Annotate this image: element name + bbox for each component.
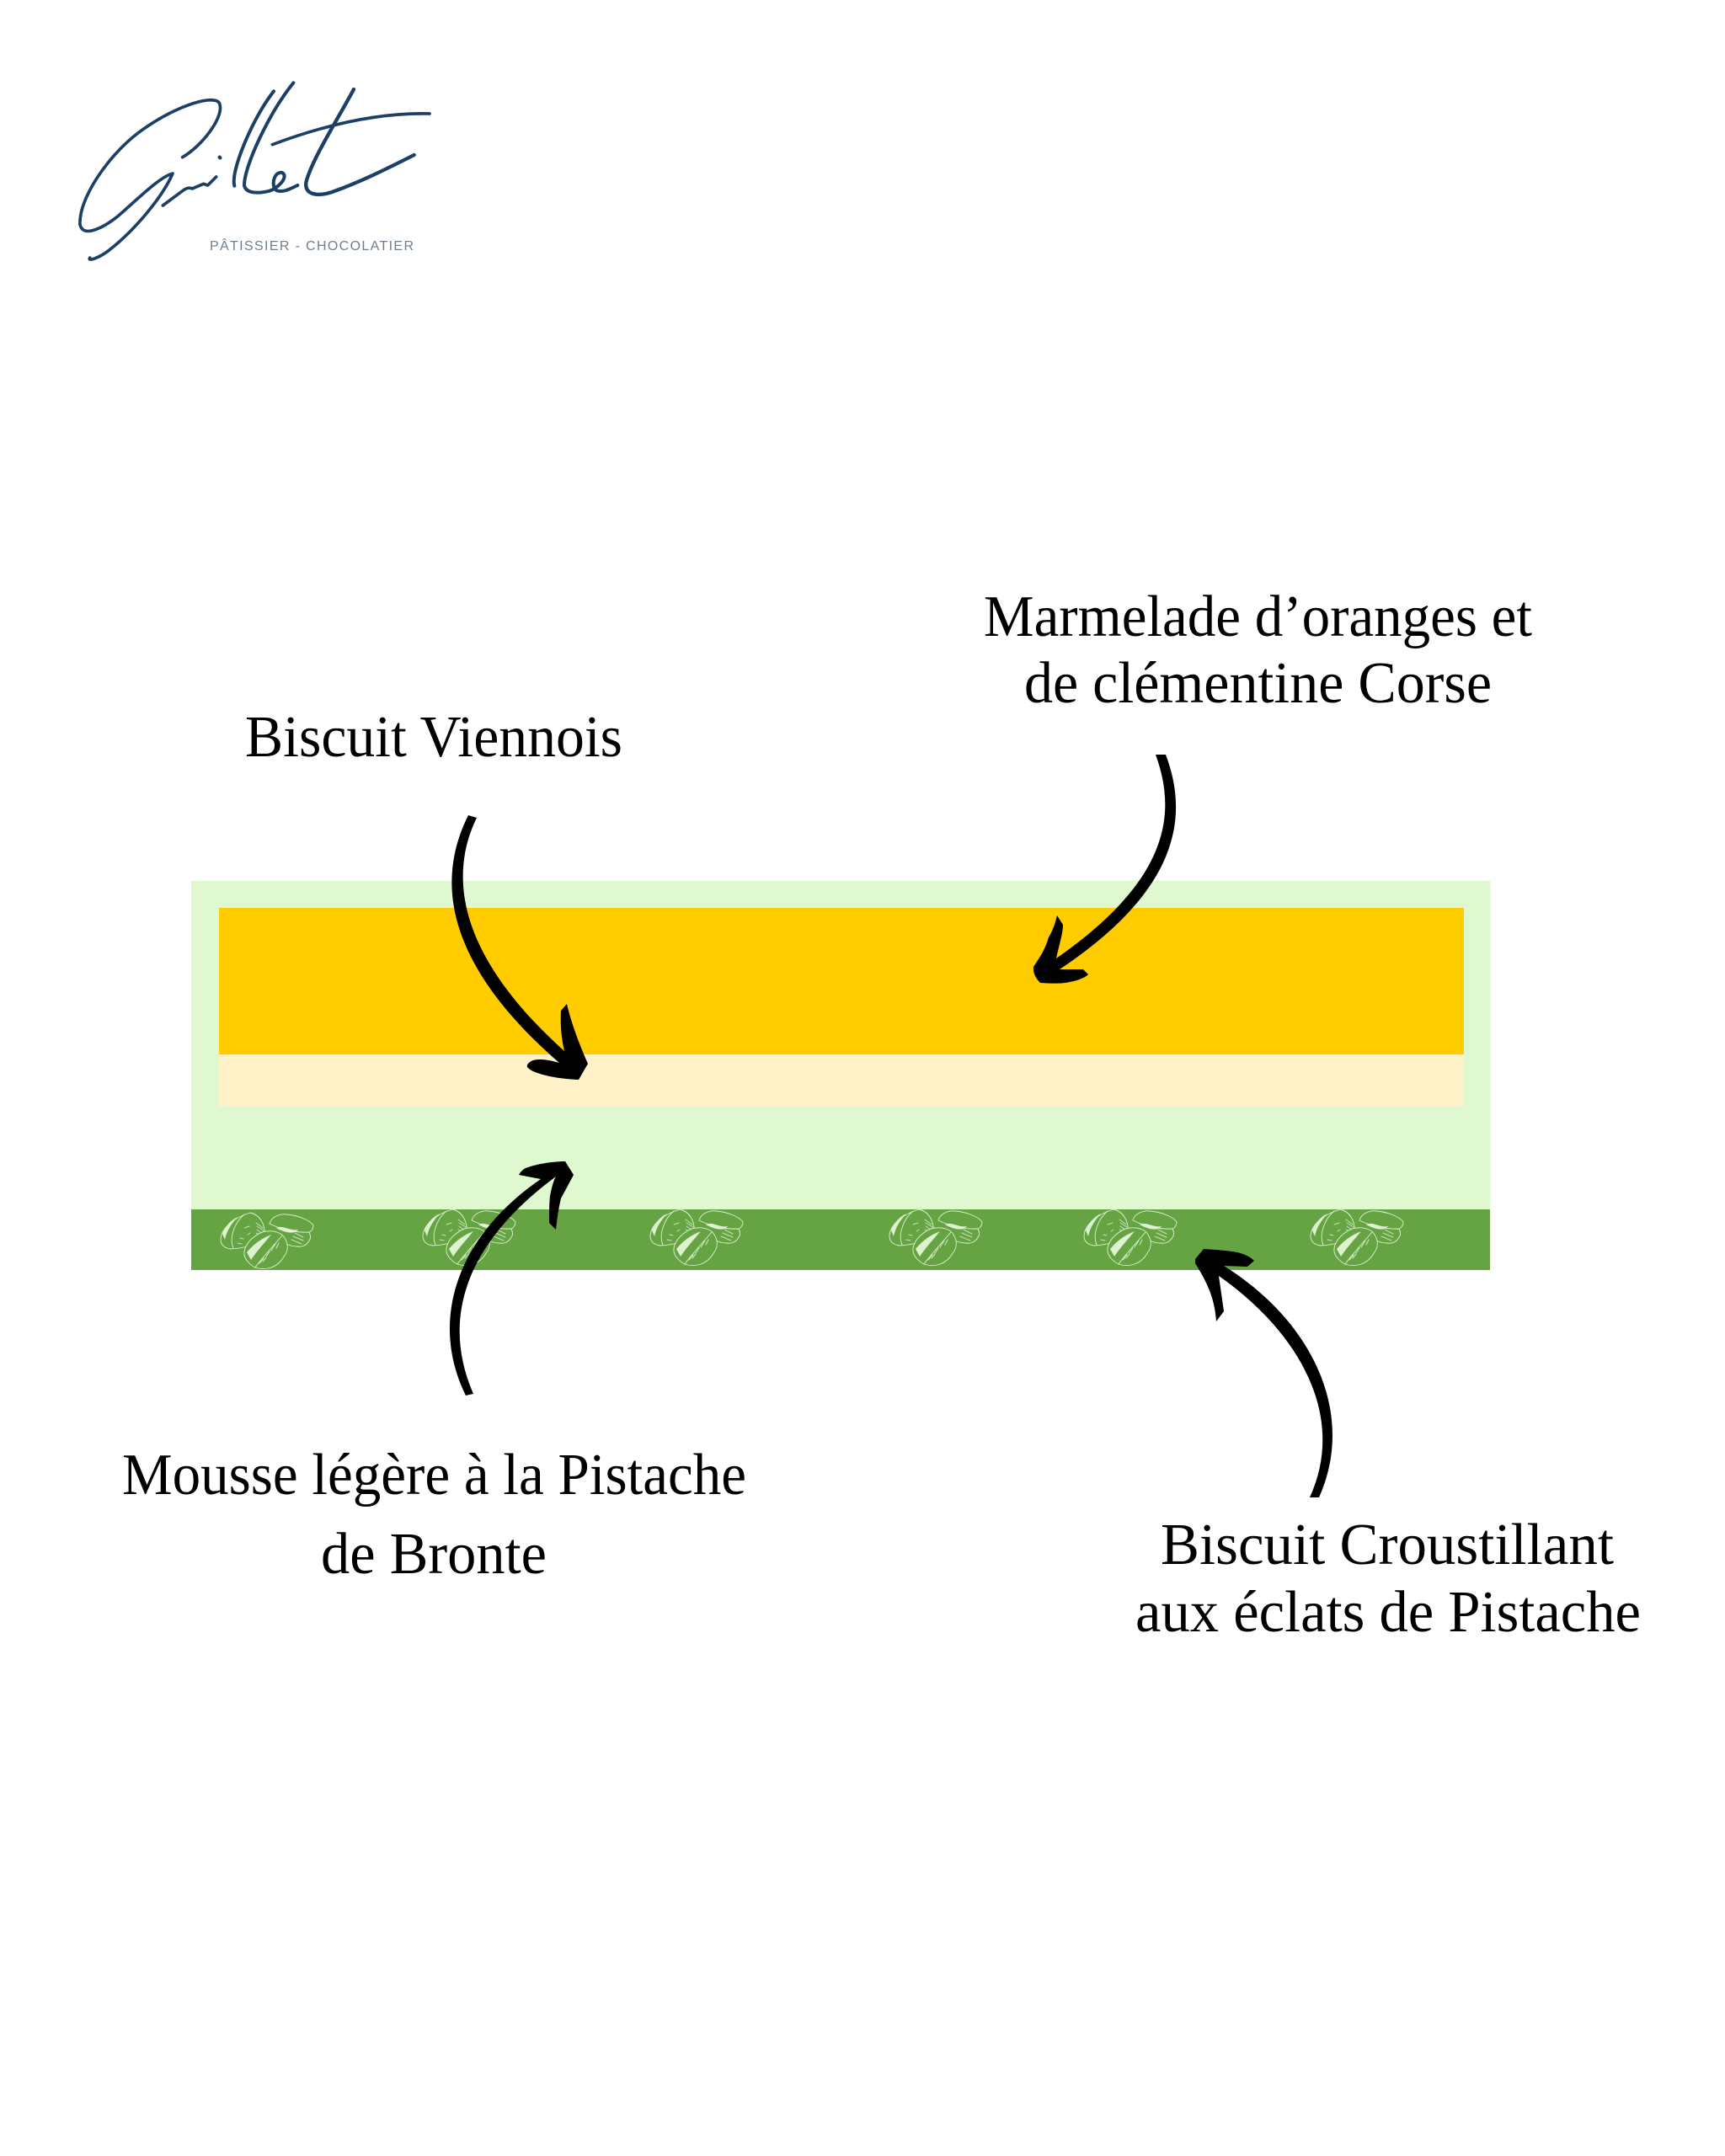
arrow: to Biscuit Croustillant [1195,1249,1332,1497]
arrow: to Marmelade [1033,755,1176,984]
layer: crunchy pistachio biscuit [191,1209,1490,1270]
label: Marmelade: Marmelade d’oranges et [984,584,1533,649]
tagline: PÂTISSIER - CHOCOLATIER [210,237,414,253]
label: Marmelade [984,584,1533,716]
label: Mousse: de Bronte [321,1522,547,1587]
arrow: to Biscuit Viennois [451,815,588,1080]
signature [80,83,430,259]
layer: biscuit viennois [219,1054,1464,1107]
layer: pistachio mousse [191,881,1490,1209]
label: Mousse: Mousse légère à la Pistache [122,1443,746,1508]
cake cross-section diagram [191,881,1490,1270]
pistachio illustrations [221,1209,1403,1268]
label: Biscuit Croustillant: Biscuit Croustillant [1161,1513,1615,1577]
label: Biscuit Croustillant: aux éclats de Pistache [1135,1580,1641,1645]
label: Marmelade: de clémentine Corse [1024,651,1492,716]
logo: Guillet signature and tagline [80,83,430,259]
arrow: to Mousse [450,1161,574,1396]
label: Biscuit Viennois: Biscuit Viennois [245,705,622,770]
layer: orange marmalade [219,908,1464,1054]
label: Biscuit Croustillant [1135,1513,1641,1645]
label: Mousse [122,1443,746,1587]
